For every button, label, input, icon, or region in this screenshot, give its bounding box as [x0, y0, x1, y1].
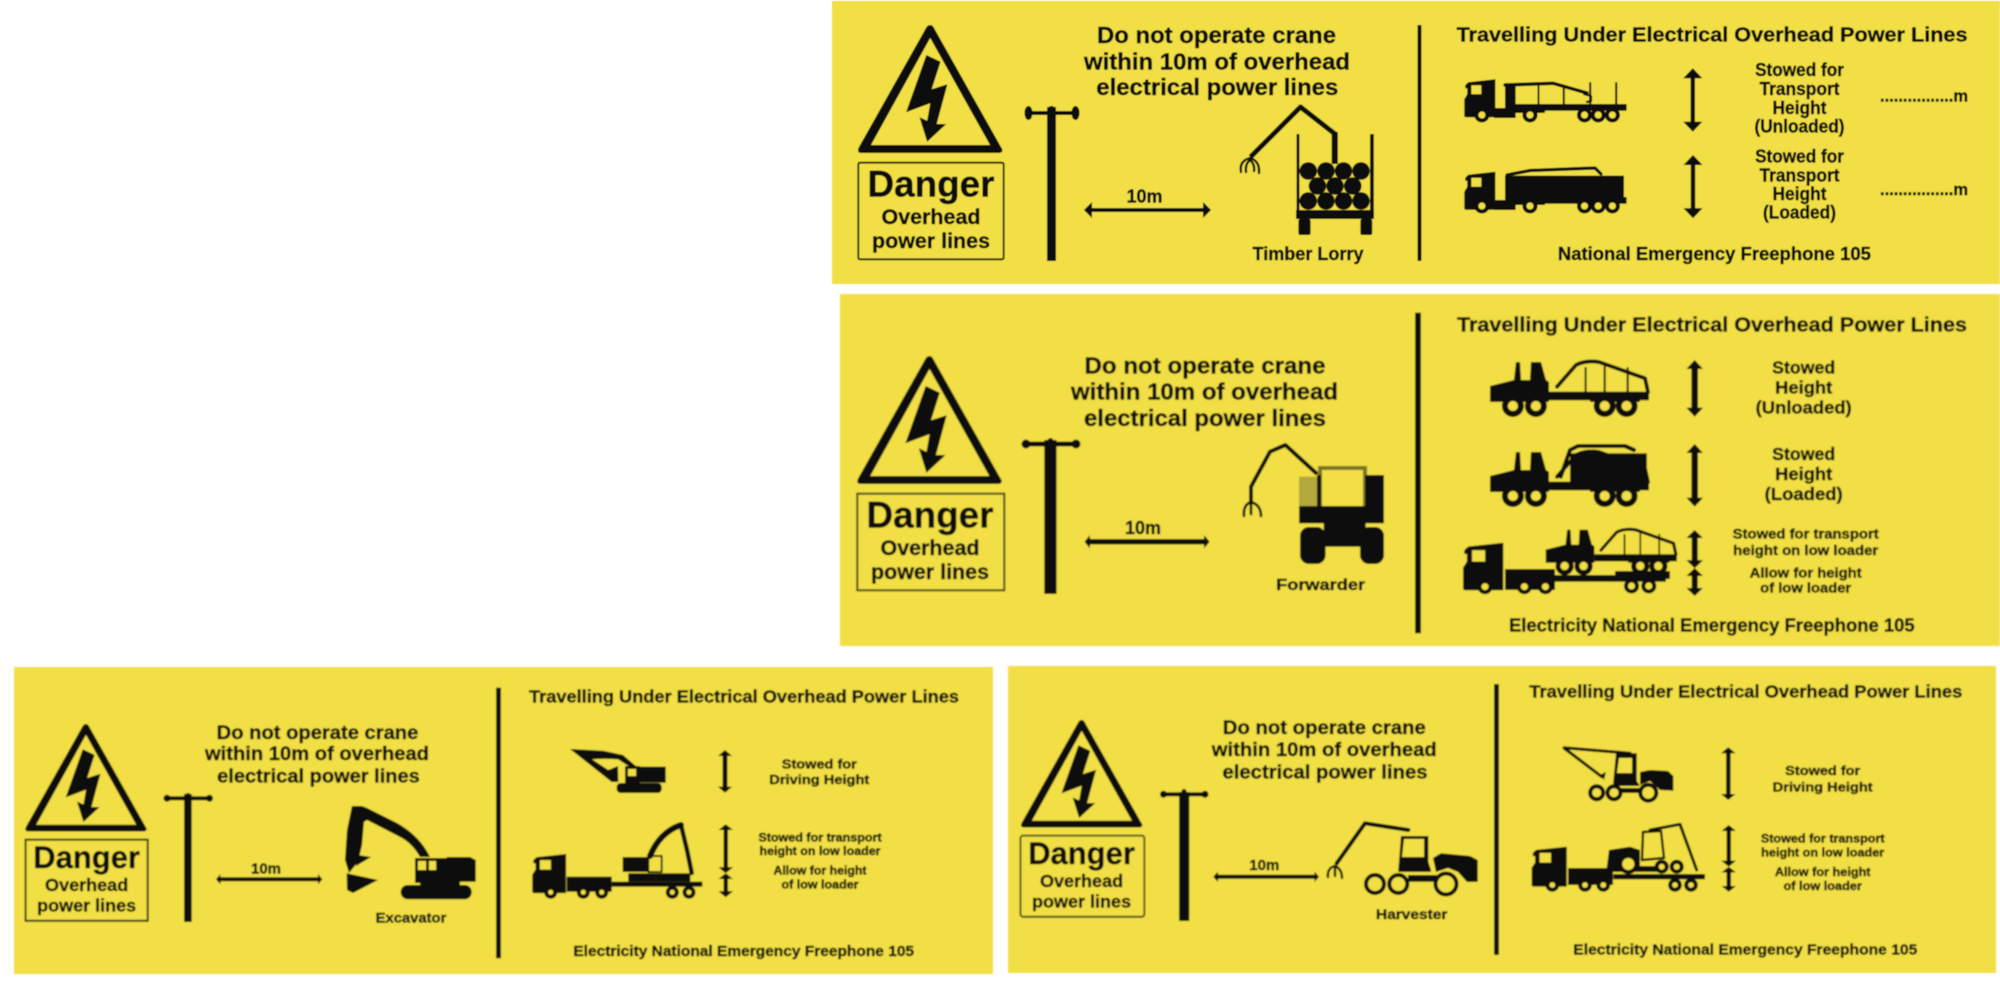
icon: height arrow loaded [1686, 444, 1703, 507]
text: stowed for transport height unloaded: Transport [1760, 79, 1840, 99]
arrow: 10m distance: 10m [1126, 187, 1162, 207]
icon: power pole [1022, 438, 1080, 594]
heading: do not operate crane [1211, 717, 1437, 783]
arrow: 10m distance [216, 860, 322, 884]
text: low loader notes [1761, 834, 1885, 893]
heading: do not operate crane: Do not operate crane [1097, 22, 1336, 48]
text: stowed for transport height unloaded: Stowed for [1755, 60, 1844, 80]
text: stowed for transport height loaded: (Loaded) [1763, 202, 1836, 222]
arrow: 10m distance [1084, 518, 1210, 548]
text: low loader notes: of low loader [782, 879, 859, 891]
text: stowed for transport height unloaded: Height [1772, 98, 1827, 118]
text: stowed for transport height unloaded: (Unloaded) [1754, 116, 1844, 136]
text: stowed height unloaded: Height [1775, 377, 1832, 397]
text: stowed for driving height: Stowed for [1785, 763, 1860, 778]
text: low loader notes: Stowed for transport [1733, 526, 1879, 541]
danger sign [857, 494, 1004, 590]
danger sign: power lines [37, 895, 136, 915]
heading: do not operate crane: within 10m of overhead [1083, 48, 1350, 74]
danger sign: power lines [1032, 891, 1131, 911]
danger sign: power lines [872, 229, 990, 253]
panel: timber lorry sign [832, 1, 2000, 284]
text: stowed for driving height: Driving Height [769, 772, 870, 787]
heading: do not operate crane: within 10m of overhead [1211, 739, 1437, 761]
icon: excavator stowed [570, 749, 666, 793]
icon: height arrow low loader [1686, 530, 1703, 596]
arrow: 10m distance: 10m [251, 860, 281, 877]
heading: travelling under power lines: Travelling Under Electrical Overhead Power Lines [529, 687, 959, 707]
icon: excavator on low loader [532, 825, 702, 897]
icon: height arrow unloaded [1686, 360, 1703, 417]
danger sign [26, 840, 148, 921]
text: low loader notes: of low loader [1784, 881, 1862, 893]
icon: harvester stowed [1564, 748, 1673, 801]
icon: height arrow loaded [1684, 155, 1702, 218]
text: stowed height unloaded [1756, 357, 1852, 417]
text: low loader notes [1733, 526, 1879, 596]
arrow: 10m distance [1213, 857, 1319, 882]
arrow: 10m distance [1084, 187, 1211, 218]
panel: excavator sign [14, 667, 993, 974]
text: low loader notes: Stowed for transport [1761, 834, 1885, 846]
icon: electrical warning triangle [25, 724, 147, 832]
text: stowed for transport height loaded [1755, 146, 1844, 222]
label: timber lorry: Timber Lorry [1252, 244, 1364, 264]
text: stowed for transport height loaded: Height [1772, 184, 1827, 204]
arrow: 10m distance: 10m [1125, 518, 1161, 538]
icon: height arrow stowed [1721, 747, 1736, 800]
text: low loader notes [758, 833, 882, 891]
panel: harvester sign [1008, 666, 1996, 973]
footer: emergency phone: Electricity National Emergency Freephone 105 [1509, 616, 1915, 636]
icon: forwarder rear view [1244, 445, 1384, 564]
footer: emergency phone: National Emergency Freephone 105 [1558, 244, 1871, 264]
icon: height arrow low loader [718, 824, 733, 897]
arrow: 10m distance: 10m [1249, 857, 1279, 874]
heading: travelling under power lines: Travelling Under Electrical Overhead Power Lines [1529, 681, 1963, 701]
icon: power pole [1160, 789, 1208, 921]
text: low loader notes: height on low loader [1733, 543, 1879, 558]
icon: forwarder loaded [1490, 446, 1649, 504]
danger sign: Overhead [880, 536, 980, 560]
divider [1494, 684, 1499, 955]
label: harvester: Harvester [1376, 906, 1448, 922]
icon: unloaded timber lorry [1464, 79, 1627, 120]
text: low loader notes: of low loader [1760, 581, 1852, 596]
icon: electrical warning triangle [857, 356, 1002, 484]
divider [1415, 313, 1421, 633]
danger sign: Danger [866, 495, 994, 536]
icon: height arrow low loader [1722, 825, 1736, 892]
text: low loader notes: Allow for height [774, 865, 867, 877]
text: stowed height unloaded: (Unloaded) [1756, 397, 1852, 417]
icon: timber lorry rear view with crane [1241, 107, 1374, 235]
text: stowed for driving height: Driving Height [1773, 780, 1873, 795]
heading: do not operate crane: within 10m of overhead [1070, 378, 1338, 404]
heading: do not operate crane: Do not operate crane [1084, 352, 1326, 378]
heading: do not operate crane: Do not operate crane [1223, 717, 1426, 739]
icon: height arrow stowed [718, 750, 732, 793]
text: low loader notes: Allow for height [1775, 867, 1871, 879]
heading: do not operate crane [204, 722, 429, 788]
footer: emergency phone: Electricity National Emergency Freephone 105 [1573, 941, 1917, 958]
text: low loader notes: Allow for height [1750, 566, 1862, 581]
divider [1418, 25, 1422, 261]
heading: do not operate crane: electrical power lines [217, 766, 420, 788]
danger sign [1020, 836, 1144, 917]
heading: do not operate crane [1070, 352, 1338, 431]
danger sign: power lines [871, 560, 989, 584]
heading: do not operate crane [1083, 22, 1350, 100]
icon: height arrow unloaded [1683, 68, 1702, 132]
danger sign: Danger [868, 164, 994, 205]
text: stowed for transport height loaded: Transport [1760, 165, 1840, 185]
divider [496, 688, 501, 958]
text: stowed for driving height [1773, 763, 1873, 795]
text: stowed height loaded: Stowed [1772, 444, 1835, 464]
danger sign: Overhead [882, 205, 980, 229]
icon: excavator [345, 806, 476, 899]
panel: forwarder sign [840, 294, 2000, 646]
icon: electrical warning triangle [858, 25, 1002, 153]
text: low loader notes: height on low loader [1761, 848, 1885, 860]
heading: do not operate crane: electrical power lines [1084, 405, 1326, 431]
icon: power pole [1024, 106, 1080, 261]
value blank: unloaded height: ................m [1880, 87, 1968, 106]
danger sign: Overhead [45, 875, 128, 895]
danger sign: Danger [33, 840, 140, 875]
text: stowed for driving height: Stowed for [782, 756, 857, 771]
icon: power pole [164, 793, 213, 922]
text: stowed for transport height loaded: Stowed for [1755, 146, 1844, 166]
icon: electrical warning triangle [1021, 720, 1142, 828]
danger sign: Danger [1028, 836, 1135, 871]
label: forwarder: Forwarder [1276, 577, 1365, 594]
heading: do not operate crane: electrical power lines [1222, 761, 1428, 783]
heading: travelling under power lines: Travelling Under Electrical Overhead Power Lines [1457, 314, 1967, 337]
heading: do not operate crane: within 10m of overhead [204, 743, 429, 765]
text: stowed for driving height [769, 756, 870, 787]
text: stowed height unloaded: Stowed [1772, 357, 1835, 377]
icon: loaded timber lorry [1464, 168, 1627, 212]
text: low loader notes: Stowed for transport [758, 833, 882, 845]
icon: harvester on low loader [1532, 824, 1705, 890]
value blank: loaded height: ................m [1880, 180, 1968, 199]
icon: forwarder unloaded [1490, 361, 1649, 414]
label: excavator: Excavator [376, 909, 447, 925]
text: stowed height loaded [1765, 444, 1843, 504]
danger sign: Overhead [1040, 871, 1123, 891]
icon: forwarder on low loader [1463, 529, 1677, 592]
icon: harvester [1328, 823, 1478, 894]
text: stowed for transport height unloaded [1754, 60, 1844, 136]
heading: do not operate crane: Do not operate crane [217, 722, 419, 744]
heading: do not operate crane: electrical power lines [1096, 74, 1338, 100]
text: stowed height loaded: Height [1775, 464, 1832, 484]
text: low loader notes: height on low loader [760, 846, 881, 858]
footer: emergency phone: Electricity National Emergency Freephone 105 [573, 943, 914, 960]
heading: travelling under power lines: Travelling Under Electrical Overhead Power Lines [1456, 24, 1968, 47]
text: stowed height loaded: (Loaded) [1765, 484, 1843, 504]
danger sign [858, 163, 1004, 259]
